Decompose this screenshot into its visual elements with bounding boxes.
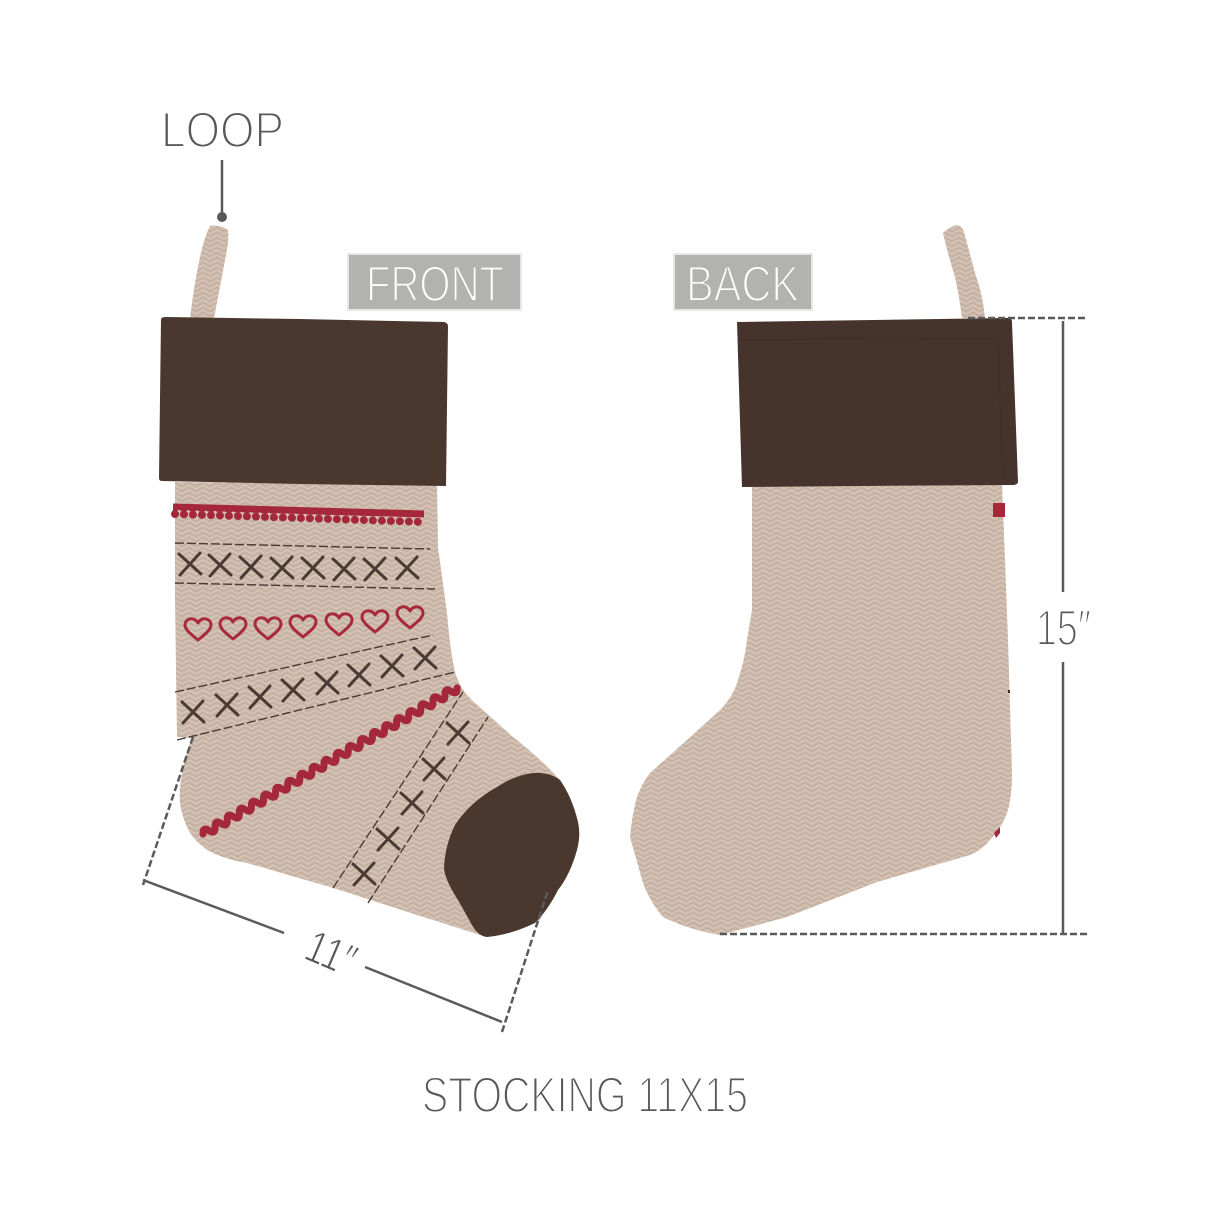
label: loop bbox=[161, 102, 284, 222]
back cuff bbox=[737, 318, 1018, 487]
back hanging loop bbox=[943, 225, 985, 318]
top stitched x row bbox=[175, 543, 435, 589]
diagonal x row bbox=[175, 635, 455, 740]
label: loop: LOOP bbox=[161, 102, 284, 158]
dimension: 11 inch width bbox=[143, 737, 548, 1032]
back cuff fold bbox=[740, 338, 1003, 478]
front hanging loop bbox=[190, 226, 228, 318]
red ric rac trim bbox=[203, 688, 457, 834]
back trim bits showing through bbox=[993, 503, 1010, 838]
red lace trim bbox=[173, 507, 424, 522]
dimension: 11 inch width: 11″ bbox=[298, 919, 364, 987]
front stocking body bbox=[175, 482, 575, 935]
product title: STOCKING 11X15 bbox=[422, 1067, 748, 1123]
back stocking body bbox=[630, 484, 1012, 935]
front stocking bbox=[159, 226, 579, 937]
foot x row bbox=[333, 692, 488, 903]
toe patch bbox=[444, 773, 579, 937]
back stocking bbox=[630, 225, 1018, 935]
dimension: 15 inch height: 15″ bbox=[1036, 600, 1091, 656]
tag: front: FRONT bbox=[366, 256, 504, 312]
tag: back: BACK bbox=[686, 256, 799, 312]
heart row bbox=[185, 607, 423, 640]
front cuff bbox=[159, 317, 448, 486]
